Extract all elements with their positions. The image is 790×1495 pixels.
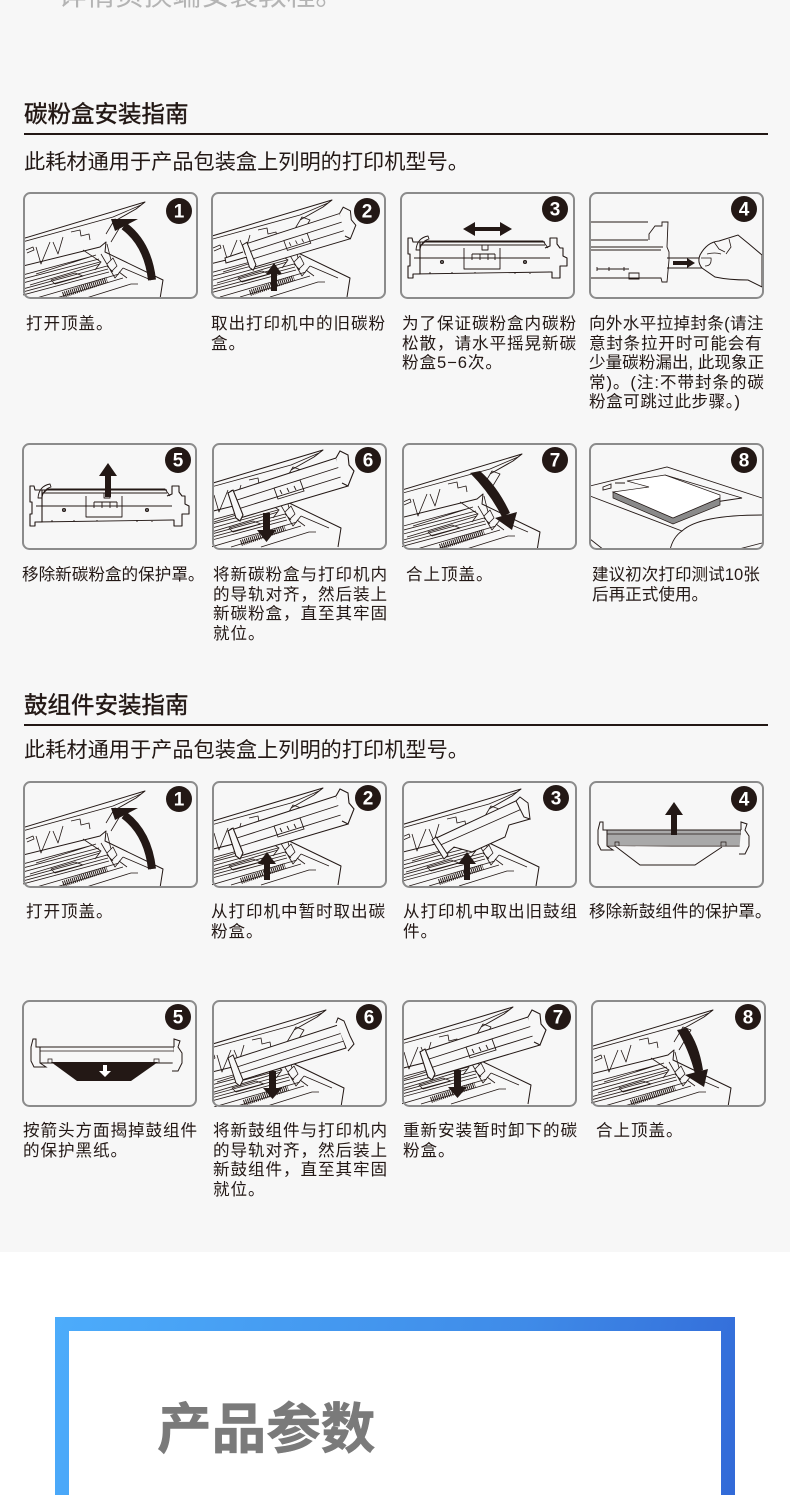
title: product parameters: 产品参数 (157, 1399, 375, 1460)
caption: toner step 2: 取出打印机中的旧碳粉 (211, 314, 386, 333)
caption: drum step 7 (403, 1121, 578, 1160)
arrow: up (266, 263, 282, 291)
subheading: drum guide: 此耗材通用于产品包装盒上列明的打印机型号。 (24, 739, 469, 762)
panel: toner step 1 (23, 192, 198, 299)
caption: drum step 6 (213, 1121, 388, 1198)
badge 1: 1 (174, 202, 185, 222)
panel: toner step 8 (589, 443, 764, 550)
panel: toner step 6 (212, 443, 387, 550)
panel: drum step 7 (402, 1000, 577, 1107)
caption: drum step 2 (211, 902, 386, 940)
badge 8 (731, 447, 757, 473)
arrow: up (99, 463, 117, 497)
arrow: double horizontal (463, 222, 512, 236)
caption: toner step 6: 的导轨对齐，然后装上 (213, 584, 388, 604)
badge 5 (165, 1004, 191, 1030)
badge 7: 7 (553, 1008, 563, 1028)
caption: drum step 5 (23, 1121, 198, 1160)
caption: toner step 3: 为了保证碳粉盒内碳粉 (402, 314, 577, 333)
caption: drum step 2: 粉盒。 (211, 922, 263, 940)
badge 2 (354, 198, 380, 224)
arrow: close lid (470, 471, 517, 530)
panel: toner step 5 (22, 443, 197, 550)
caption: drum step 5: 的保护黑纸。 (23, 1140, 128, 1160)
caption: toner step 8: 建议初次打印测试10张 (592, 565, 760, 584)
caption: drum step 7: 粉盒。 (403, 1140, 455, 1160)
caption: drum step 4: 移除新鼓组件的保护罩。 (589, 902, 772, 921)
icon: paper stack (613, 475, 720, 524)
section: toner cartridge guide (22, 101, 768, 642)
section: drum unit guide (22, 692, 772, 1198)
badge 4: 4 (739, 790, 750, 810)
badge 8: 8 (743, 1008, 753, 1028)
panel: drum step 4 (589, 781, 764, 888)
badge 1 (166, 198, 192, 224)
badge 2: 2 (363, 788, 373, 810)
caption: drum step 7: 重新安装暂时卸下的碳 (403, 1121, 578, 1140)
caption: toner step 7: 合上顶盖。 (406, 565, 493, 584)
caption: toner step 4: 粉盒可跳过此步骤。) (589, 392, 741, 411)
caption: drum step 6: 将新鼓组件与打印机内 (213, 1121, 388, 1140)
subheading: toner guide: 此耗材通用于产品包装盒上列明的打印机型号。 (24, 151, 469, 174)
badge 1: 1 (174, 790, 185, 810)
badge 3: 3 (551, 788, 561, 810)
caption: toner step 6: 将新碳粉盒与打印机内 (213, 565, 388, 584)
badge 3 (543, 785, 569, 811)
panel: toner step 4 (589, 192, 764, 299)
caption: toner step 4: 向外水平拉掉封条(请注 (589, 314, 764, 333)
drum with black sheet (31, 1039, 182, 1081)
caption: drum step 3: 件。 (403, 922, 438, 940)
arrow: down (448, 1070, 467, 1098)
badge 2 (355, 785, 381, 811)
caption: toner step 8: 后再正式使用。 (592, 584, 708, 604)
badge 6 (355, 447, 381, 473)
badge 7 (542, 447, 568, 473)
badge 4: 4 (739, 200, 750, 220)
caption: toner step 2: 盒。 (211, 334, 246, 352)
caption: toner step 3: 松散，请水平摇晃新碳 (402, 334, 577, 352)
arrow: pull strip (673, 258, 695, 268)
caption: toner step 6 (213, 565, 388, 642)
caption: toner step 6: 新碳粉盒，直至其牢固 (213, 604, 388, 623)
badge 3 (542, 196, 568, 222)
panel: drum step 2 (212, 781, 387, 888)
cartridge with protective sheet (432, 797, 530, 859)
arrow: up (665, 802, 683, 835)
arrow: down (257, 513, 276, 542)
caption: toner step 3 (402, 314, 577, 372)
panel: toner step 7 (402, 443, 577, 550)
heading: toner guide: 碳粉盒安装指南 (24, 101, 188, 127)
caption: toner step 3: 粉盒5−6次。 (402, 353, 503, 372)
caption: drum step 3 (403, 902, 578, 940)
badge 5: 5 (173, 450, 184, 472)
caption: toner step 4: 意封条拉开时可能会有 (589, 334, 762, 352)
caption: drum step 8: 合上顶盖。 (596, 1121, 683, 1140)
badge 8: 8 (739, 450, 749, 472)
badge 7 (545, 1004, 571, 1030)
badge 8 (735, 1004, 761, 1030)
badge 1 (166, 786, 192, 812)
badge 6: 6 (363, 450, 373, 472)
badge 6: 6 (364, 1008, 374, 1028)
caption: drum step 6: 就位。 (213, 1180, 265, 1198)
arrow: close lid (677, 1028, 708, 1087)
arrow: open lid (111, 219, 152, 280)
panel: drum step 6 (212, 1000, 387, 1107)
caption: toner step 5: 移除新碳粉盒的保护罩。 (22, 565, 205, 584)
badge 5: 5 (173, 1008, 184, 1028)
panel: drum step 3 (402, 781, 577, 888)
arrow: open lid (111, 808, 152, 869)
badge 2: 2 (362, 202, 372, 222)
arrow: up (258, 852, 276, 880)
badge 3: 3 (550, 200, 560, 220)
panel: toner step 2 (211, 192, 386, 299)
caption: drum step 6: 新鼓组件，直至其牢固 (213, 1160, 388, 1179)
panel: drum step 8 (591, 1000, 766, 1107)
arrow: down (263, 1071, 282, 1099)
badge 4 (731, 196, 757, 222)
badge 6 (356, 1004, 382, 1030)
badge 5 (165, 447, 191, 473)
caption: toner step 6: 就位。 (213, 624, 265, 642)
caption: drum step 2: 从打印机中暂时取出碳 (211, 902, 386, 921)
panel: drum step 1 (23, 781, 198, 888)
caption: drum step 1: 打开顶盖。 (26, 902, 113, 921)
heading: drum guide: 鼓组件安装指南 (24, 692, 188, 718)
arrow: up (458, 852, 476, 880)
panel: product parameters frame (55, 1317, 735, 1495)
caption: drum step 6: 的导轨对齐，然后装上 (213, 1140, 388, 1160)
caption: drum step 3: 从打印机中取出旧鼓组 (403, 902, 578, 921)
caption: drum step 5: 按箭头方面揭掉鼓组件 (23, 1121, 198, 1140)
drum with gray band (598, 822, 749, 865)
caption: toner step 2 (211, 314, 386, 352)
caption: toner step 4: 少量碳粉漏出, 此现象正 (589, 353, 764, 372)
caption: toner step 1: 打开顶盖。 (26, 314, 113, 333)
white inner panel (69, 1331, 721, 1495)
caption: toner step 4 (589, 314, 765, 411)
caption: toner step 4: 常)。(注:不带封条的碳 (589, 372, 765, 392)
badge 4 (731, 786, 757, 812)
panel: drum step 5 (22, 1000, 197, 1107)
badge 7: 7 (550, 450, 560, 472)
caption: toner step 8 (592, 565, 760, 604)
arrow: white down (99, 1065, 111, 1077)
icon: hand (699, 235, 762, 287)
panel: toner step 3 (400, 192, 575, 299)
